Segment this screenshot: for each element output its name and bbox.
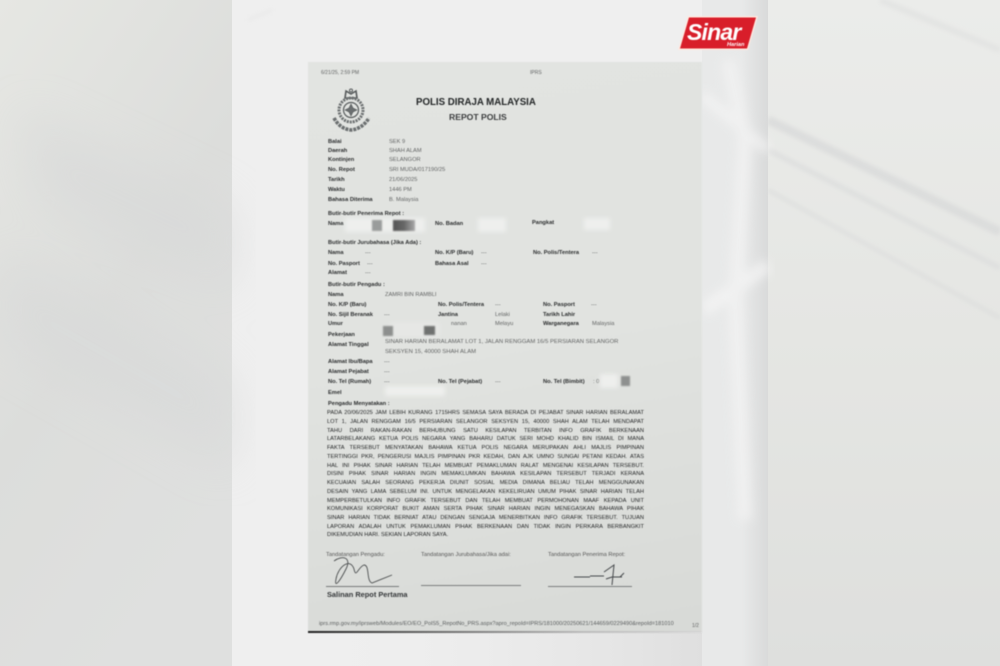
subtitle: REPOT POLIS	[449, 112, 507, 122]
section: complainant details: Alamat Ibu/Bapa	[328, 359, 373, 365]
section: interpreter details: ---	[365, 250, 371, 256]
section: complainant details: ZAMRI BIN RAMBLI	[385, 292, 437, 298]
section: complainant details: ---	[384, 312, 390, 318]
section: complainant details: Pekerjaan	[328, 332, 355, 338]
section: complainant details: ---	[495, 379, 501, 385]
section: station details: Tarikh	[328, 177, 345, 183]
statement body text: FAKTA TERSEBUT MENYATAKAN BAHAWA KETUA POLIS NEGARA MERUPAKAN AHLI MAJLIS PIMPINAN	[327, 445, 644, 451]
print timestamp: 6/21/25, 2:59 PM	[321, 70, 359, 76]
section: complainant details: Jantina	[438, 312, 458, 318]
section: complainant details: No. Tel (Pejabat)	[438, 379, 482, 385]
signature block: receiver	[548, 551, 632, 588]
title: POLIS DIRAJA MALAYSIA	[416, 97, 536, 108]
section: interpreter details: ---	[365, 270, 371, 276]
section: interpreter details: No. K/P (Baru)	[435, 250, 473, 256]
statement body text: KOMUNIKASI KORPORAT BUKIT AMAN SERTA PIHAK SINAR HARIAN INGIN MENEGASKAN BAHAWA PIHAK	[327, 506, 644, 512]
section: interpreter details: Nama	[328, 250, 344, 256]
system label: IPRS	[530, 70, 542, 76]
section: complainant details: SINAR HARIAN BERALAMAT LOT 1, JALAN RENGGAM 16/5 PERSIARAN SELANGOR	[385, 339, 618, 345]
section: complainant details: Lelaki	[495, 312, 510, 318]
section: complainant details: ---	[384, 369, 390, 375]
section: interpreter details: ---	[592, 250, 598, 256]
section: complainant details: Umur	[328, 321, 343, 327]
section: station details: Kontinjen	[328, 157, 354, 163]
section: station details: Daerah	[328, 148, 347, 154]
section: interpreter details: No. Polis/Tentera	[533, 250, 579, 256]
section: complainant details: Warganegara	[543, 321, 579, 327]
section: interpreter details: ---	[367, 261, 373, 267]
section: complainant details: ---	[591, 302, 597, 308]
section: interpreter details: Butir-butir Jurubahasa (Jika Ada) :	[328, 240, 421, 246]
section: station details: Bahasa Diterima	[328, 197, 373, 203]
section: report receiver: Pangkat	[532, 220, 554, 226]
page URL footer: iprs.rmp.gov.my/iprsweb/Modules/EO/EO_PolS5_RepotNo_PRS.aspx?apro_repoId=IPRS/181000/20250621/144659/0229490&repoId=181010	[319, 621, 674, 627]
statement body text: DESAIN YANG LAMA SEBELUM INI. UNTUK MENGELAKAN KEKELIRUAN UMUM PIHAK SINAR HARIAN TELAH	[327, 489, 644, 495]
statement body text: SINAR HARIAN TIDAK BERNIAT ATAU DENGAN SENGAJA MENERBITKAN INFO GRAFIK TERSEBUT. TUJUAN	[327, 515, 644, 521]
section: station details: Balai	[328, 139, 342, 145]
section: interpreter details: Alamat	[328, 270, 347, 276]
statement body text: DISINI PIHAK SINAR HARIAN INGIN MEMAKLUMKAN BAHAWA KESILAPAN TERSEBUT TERJADI KERANA	[327, 471, 644, 477]
section: station details: SELANGOR	[389, 157, 421, 163]
section: complainant details: Malaysia	[592, 321, 614, 327]
section: station details: B. Malaysia	[389, 197, 418, 203]
section: station details: SEK 9	[389, 139, 405, 145]
section: complainant details: ---	[495, 302, 501, 308]
section: report receiver	[328, 210, 609, 232]
page footer shadow line	[308, 631, 702, 633]
section: station details: No. Repot	[328, 167, 355, 173]
section: complainant details: Nama	[328, 292, 344, 298]
section: complainant details: Melayu	[495, 321, 513, 327]
section: complainant details: Tarikh Lahir	[543, 312, 575, 318]
section: station details: 21/06/2025	[389, 177, 417, 183]
section: complainant details: Alamat Tinggal	[328, 342, 369, 348]
statement body text: MEMPERBETULKAN INFO GRAFIK TERSEBUT DAN TELAH MEMBUAT PERMOHONAN MAAF KEPADA UNIT	[327, 498, 644, 504]
section: station details	[328, 138, 446, 203]
section: complainant details: nanan	[451, 321, 467, 327]
statement body text: TAHU DARI RAKAN-RAKAN BERHUBUNG SATU KESILAPAN TERBITAN INFO GRAFIK BERKENAAN	[327, 428, 644, 434]
logo: Sinar Harian: Harian	[727, 42, 744, 48]
paper sheet	[308, 62, 702, 632]
statement body text: DIKEMUDIAN HARI. SEKIAN LAPORAN SAYA.	[327, 532, 448, 538]
signature block: complainant: Tandatangan Pengadu:	[326, 552, 385, 558]
section: report receiver: Nama	[328, 221, 344, 227]
statement body text: LOT 1, JALAN RENGGAM 16/5 PERSIARAN SELANGOR SEKSYEN 15, 40000 SHAH ALAM TELAH MENDAPAT	[327, 419, 644, 425]
section: interpreter details: Bahasa Asal	[435, 261, 469, 267]
logo: Sinar Harian	[678, 16, 758, 50]
first copy label: Salinan Repot Pertama	[327, 590, 408, 599]
section: station details: 1446 PM	[389, 187, 412, 193]
section: interpreter details: No. Pasport	[328, 261, 360, 267]
section: interpreter details: ---	[481, 261, 487, 267]
section: complainant details: No. Tel (Rumah)	[328, 379, 371, 385]
signature block: interpreter: Tandatangan Jurubahasa/Jika adai:	[421, 552, 511, 558]
statement body text: LATARBELAKANG KETUA POLIS NEGARA YANG BAHARU DATUK SERI MOHD KHALID BIN ISMAIL DI MANA	[327, 436, 644, 442]
page number: 1/2	[692, 623, 699, 629]
section: complainant details: No. Pasport	[543, 302, 575, 308]
section: station details: SRI MUDA/017190/25	[389, 167, 445, 173]
section: complainant details: SEKSYEN 15, 40000 SHAH ALAM	[385, 349, 476, 355]
section: report receiver: No. Badan	[435, 221, 463, 227]
signature block: receiver: Tandatangan Penerima Repot:	[548, 552, 625, 558]
section: interpreter details: ---	[481, 250, 487, 256]
section: station details: Waktu	[328, 187, 345, 193]
section: complainant details: No. Polis/Tentera	[438, 302, 484, 308]
statement body text: HAL INI PIHAK SINAR HARIAN TELAH MEMBUAT PEMAKLUMAN RALAT MENGENAI KESILAPAN TERSEBUT.	[327, 462, 644, 468]
section: complainant details: : 0	[593, 379, 599, 385]
statement body text: TERTINGGI PKR, PENGERUSI MAJLIS PIMPINAN PKR KEDAH, DAN AJK UMNO SUNGAI PETANI KEDAH. ATAS	[327, 454, 644, 460]
section: complainant details: Emel	[328, 390, 342, 396]
section: complainant statement: Pengadu Menyatakan :	[328, 401, 390, 407]
section: complainant details: No. Sijil Beranak	[328, 312, 373, 318]
section: complainant details: Alamat Pejabat	[328, 369, 369, 375]
section: complainant details: ---	[384, 379, 390, 385]
section: complainant details: ---	[384, 359, 390, 365]
statement body text: LAPORAN ADALAH UNTUK PEMAKLUMAN PIHAK BERKENAAN DAN TIDAK INGIN PERKARA BERBANGKIT	[327, 524, 644, 530]
section: interpreter details	[328, 239, 598, 276]
section: complainant details: No. K/P (Baru)	[328, 302, 366, 308]
icon: police crest	[332, 88, 370, 132]
statement body text: PADA 20/06/2025 JAM LEBIH KURANG 1715HRS SEMASA SAYA BERADA DI PEJABAT SINAR HARIAN BERALAMAT	[327, 410, 644, 416]
statement body text: KECUAIAN SALAH SEORANG PEKERJA DIUNIT SOSIAL MEDIA DIMANA BELIAU TELAH MENGGUNAKAN	[327, 480, 644, 486]
section: complainant details: No. Tel (Bimbit)	[543, 379, 585, 385]
section: complainant details: Butir-butir Pengadu :	[328, 282, 385, 288]
section: station details: SHAH ALAM	[389, 148, 422, 154]
logo: Sinar Harian: Sinar	[687, 19, 741, 45]
section: report receiver: Butir-butir Penerima Repot :	[328, 211, 404, 217]
signature block: complainant	[326, 551, 400, 588]
section: complainant details	[328, 281, 631, 396]
